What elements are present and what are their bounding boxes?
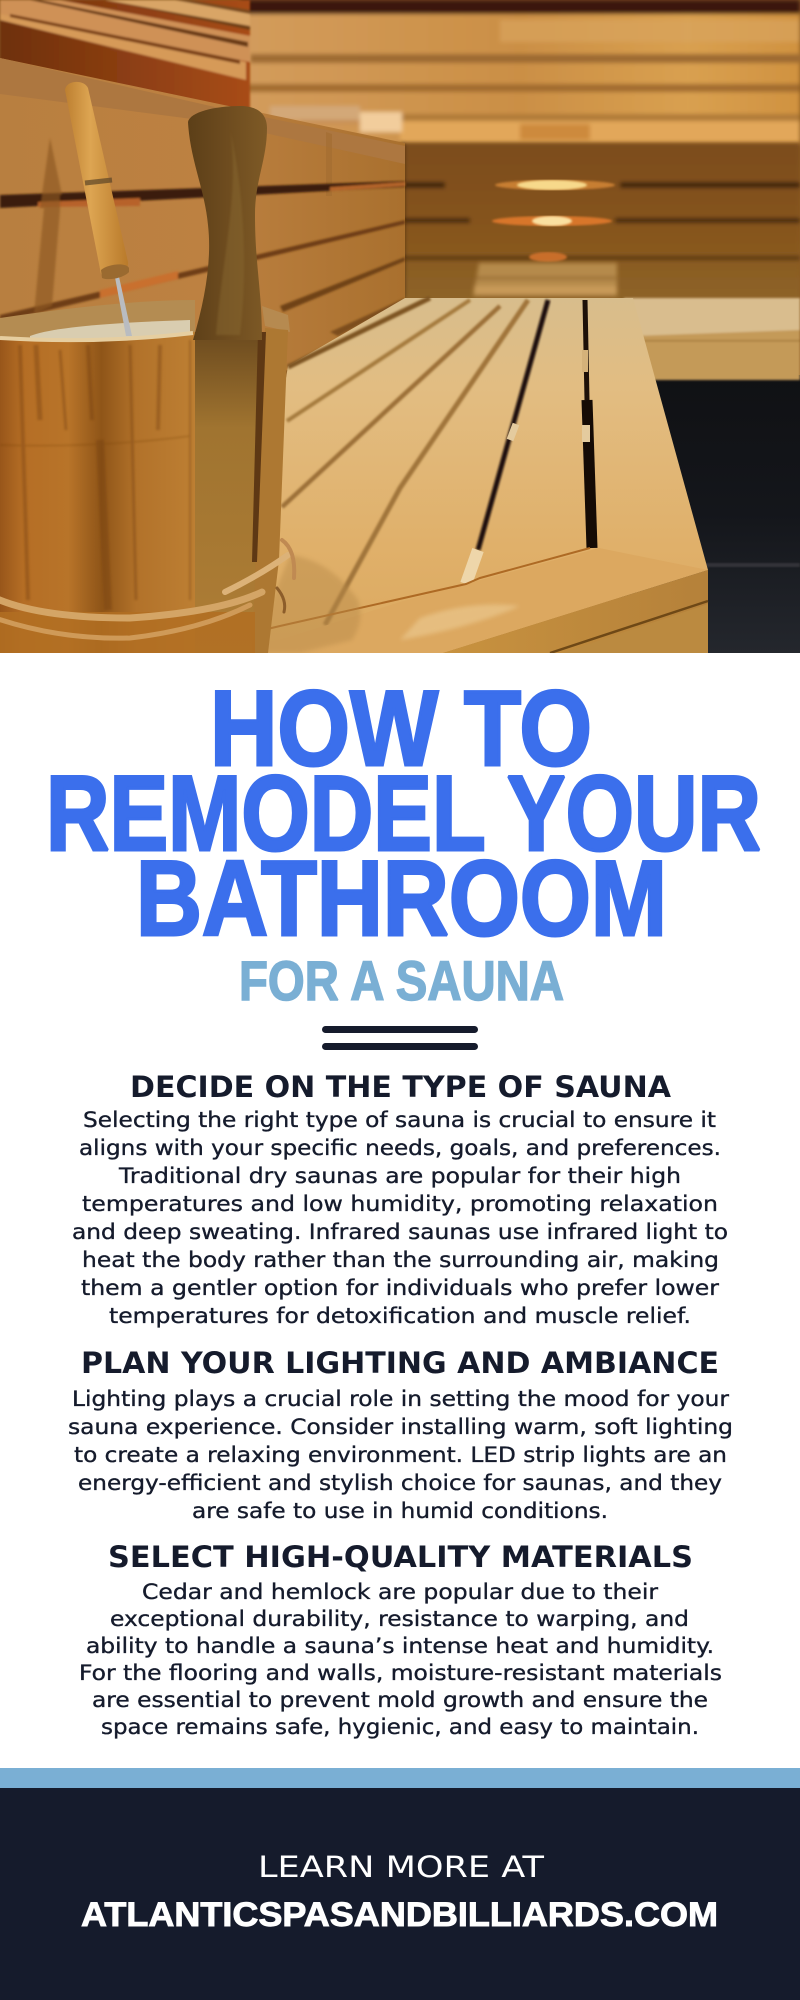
back wall upper slats (240, 0, 800, 144)
body text: ability to handle a sauna’s intense heat and humidity. (86, 1634, 714, 1658)
title: HOW TO (210, 668, 592, 788)
call to action: LEARN MORE AT (258, 1850, 544, 1884)
headrest pillow (473, 263, 617, 305)
wooden bucket (0, 106, 294, 653)
section: select high-quality materials (79, 1540, 722, 1739)
bucket shadow on bench (268, 556, 360, 653)
section: plan your lighting and ambiance (68, 1346, 733, 1523)
wall gaps 3 and 4 (280, 257, 405, 336)
body text: temperatures and low humidity, promoting relaxation (82, 1192, 718, 1216)
body text: For the flooring and walls, moisture-resistant materials (79, 1661, 722, 1685)
website: ATLANTICSPASANDBILLIARDS.COM (81, 1896, 718, 1934)
body text: exceptional durability, resistance to warping, and (110, 1607, 689, 1631)
heading: DECIDE ON THE TYPE OF SAUNA (130, 1070, 671, 1104)
right lower bench and dark floor (620, 298, 800, 653)
rope around bucket (0, 540, 294, 638)
wall gap 1 (0, 181, 405, 208)
body text: Traditional dry saunas are popular for their high (118, 1164, 681, 1188)
slat gaps (282, 298, 592, 625)
body text: temperatures for detoxification and muscle relief. (109, 1304, 691, 1328)
body text: heat the body rather than the surrounding air, making (82, 1248, 719, 1272)
body text: are essential to prevent mold growth and ensure the (92, 1688, 708, 1712)
body text (72, 1108, 728, 1328)
body text: Selecting the right type of sauna is crucial to ensure it (83, 1108, 716, 1132)
heading: PLAN YOUR LIGHTING AND AMBIANCE (81, 1346, 719, 1380)
body text: and deep sweating. Infrared saunas use infrared light to (72, 1220, 728, 1244)
back wall lower slats with lights (400, 143, 800, 300)
bench front frame (271, 547, 708, 653)
body text: to create a relaxing environment. LED strip lights are an (74, 1443, 727, 1467)
body text: space remains safe, hygienic, and easy to maintain. (101, 1715, 699, 1739)
bucket body staves (0, 328, 288, 653)
wall light strips (492, 180, 615, 262)
body text (68, 1387, 733, 1523)
hero photo: sauna interior with wooden bucket (0, 0, 800, 653)
bench top with slats (240, 298, 708, 653)
body text: Lighting plays a crucial role in setting the mood for your (72, 1387, 729, 1411)
body text: energy-efficient and stylish choice for saunas, and they (78, 1471, 722, 1495)
body text (79, 1580, 722, 1739)
ladle shadow on wall (34, 138, 62, 314)
title: BATHROOM (136, 838, 667, 958)
subtitle: FOR A SAUNA (239, 949, 564, 1012)
bucket long handle (188, 106, 267, 340)
title (46, 668, 761, 958)
footer panel (0, 1788, 800, 2000)
double rule divider (322, 1026, 478, 1050)
body text: aligns with your specific needs, goals, and preferences. (79, 1136, 721, 1160)
light blue band (0, 1768, 800, 1788)
ladle (65, 82, 132, 336)
section: decide on the type of sauna (72, 1070, 728, 1328)
bucket wood grain (0, 340, 190, 610)
bucket rim and water (0, 300, 290, 342)
body text: sauna experience. Consider installing warm, soft lighting (68, 1415, 733, 1439)
body text: them a gentler option for individuals who prefer lower (81, 1276, 719, 1300)
left wall backrest (0, 58, 406, 370)
body text: are safe to use in humid conditions. (192, 1499, 608, 1523)
ceiling slats upper left (0, 0, 250, 110)
body text: Cedar and hemlock are popular due to their (142, 1580, 658, 1604)
wall gap 2 (0, 220, 405, 322)
heading: SELECT HIGH-QUALITY MATERIALS (108, 1540, 693, 1574)
